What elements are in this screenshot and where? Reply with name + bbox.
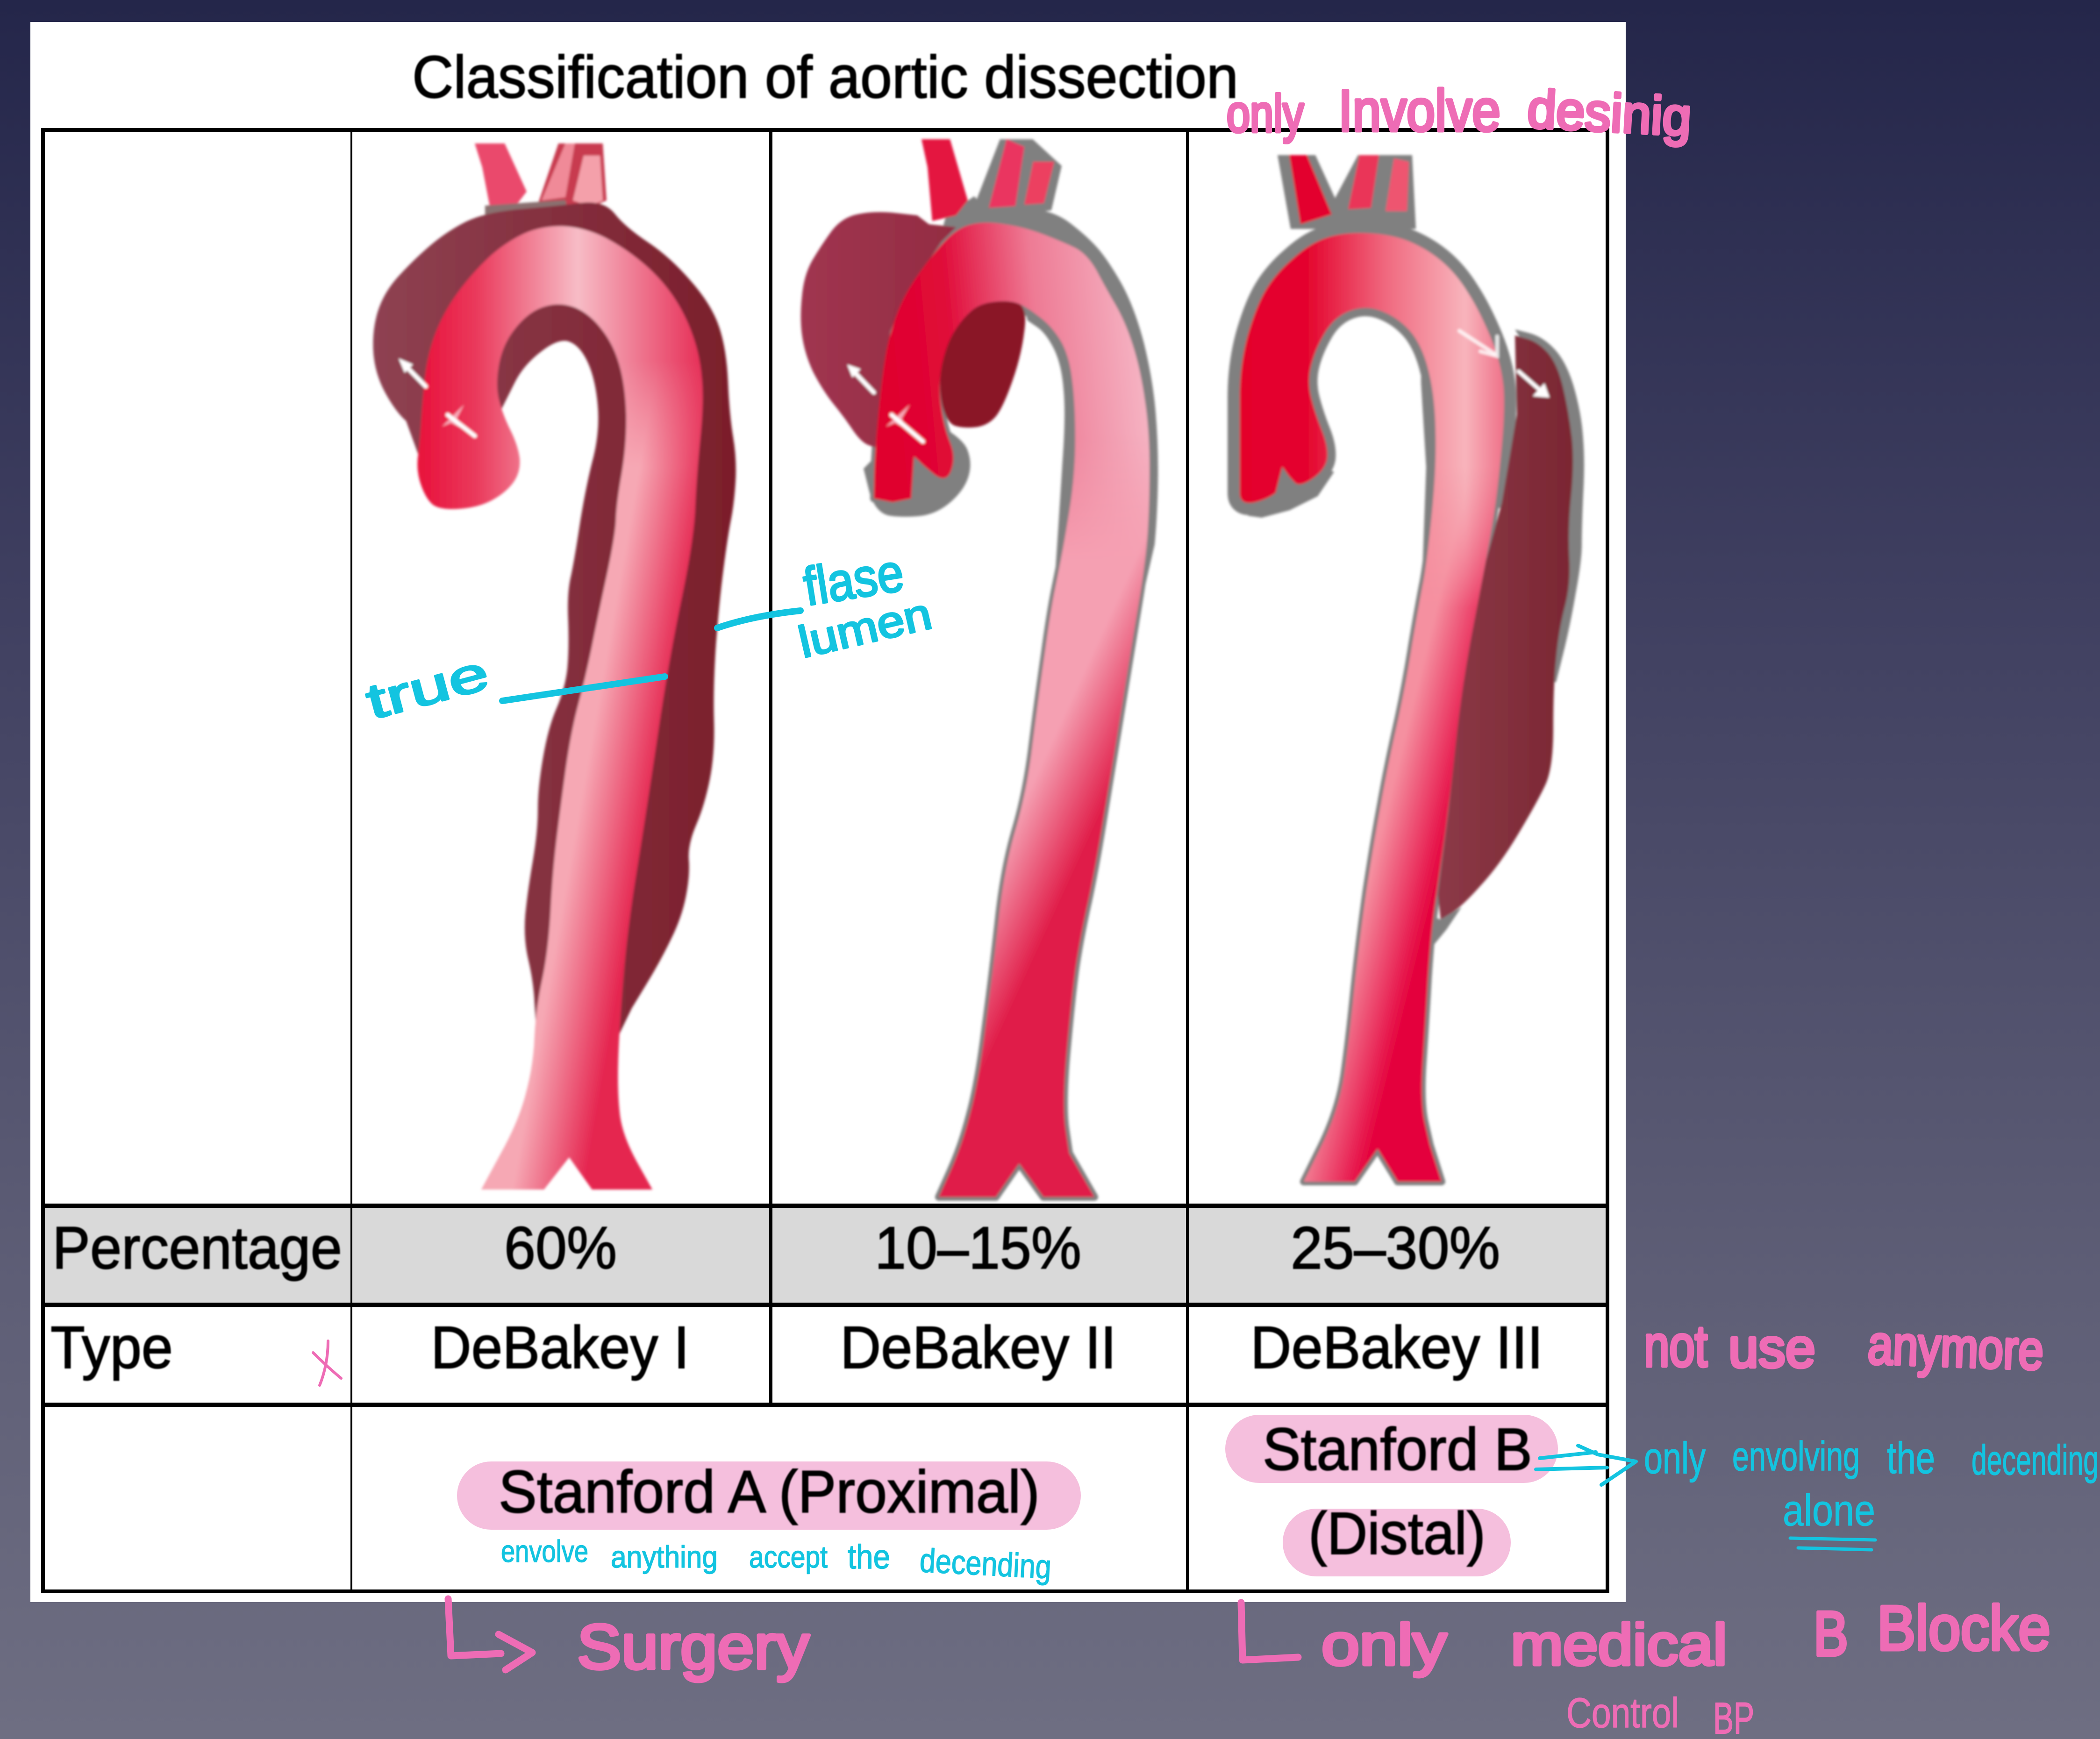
annotation: B blocker: Blocke: [1877, 1593, 2050, 1663]
true lumen: [417, 226, 703, 1190]
annotation: surgery: Surgery: [577, 1611, 810, 1682]
annotation: only envolving the decending alone: the: [1887, 1433, 1935, 1483]
value: 60%: 60%: [504, 1215, 617, 1282]
aorta diagram: DeBakey III: [1240, 155, 1584, 1182]
aorta diagram: DeBakey II: [801, 139, 1158, 1197]
highlight: Distal: (Distal): [1308, 1500, 1486, 1567]
false lumen: inner arch sac: [940, 301, 1025, 428]
value: 25-30%: 25–30%: [1291, 1215, 1500, 1282]
entry arrows: [847, 364, 923, 442]
row label: percentage: Percentage: [52, 1215, 342, 1282]
true lumen shading: descending segment: [481, 335, 703, 1190]
annotation: only medical: [1321, 1612, 1727, 1677]
false lumen: ascending sac: [801, 212, 956, 448]
table grid: [41, 130, 1609, 1591]
annotation: only envolving the decending alone: [1644, 1433, 2099, 1550]
grey wall: [864, 139, 1158, 1197]
true lumen: [1240, 233, 1504, 1182]
true lumen shading: descending segment: [1303, 491, 1495, 1183]
annotation: B blocker: [1814, 1593, 2050, 1669]
annotation: envolve anything accept the decending: anything: [611, 1539, 718, 1574]
row label: type: Type: [50, 1314, 173, 1381]
grey wall: [1240, 155, 1584, 1182]
annotation: not use anymore: not: [1644, 1314, 1707, 1379]
annotation: only involve descending: only: [1227, 85, 1304, 143]
annotation: arrow from Stanford B: [1536, 1446, 1636, 1485]
annotation: true lumen: [361, 645, 665, 730]
title: Classification of aortic dissection: [412, 44, 1238, 111]
true lumen shading: descending segment: [940, 479, 1147, 1198]
annotation: false lumen: flase: [800, 542, 907, 617]
entry arrows: [399, 358, 475, 436]
annotation: true lumen: true: [361, 645, 494, 730]
annotation: only medical: only: [1321, 1612, 1447, 1677]
annotation: control BP: Control: [1566, 1690, 1679, 1737]
branch vessels: [1289, 155, 1409, 224]
annotation: envolve anything accept the decending: decending: [919, 1542, 1052, 1586]
annotation: control BP: [1566, 1690, 1754, 1739]
annotation: false lumen: lumen: [794, 589, 936, 667]
false lumen: descending sac: [1438, 335, 1573, 919]
annotation: only envolving the decending alone: only: [1644, 1433, 1706, 1483]
annotation: only medical: medical: [1511, 1612, 1727, 1677]
table text: [50, 1215, 1543, 1381]
annotation: only involve descending: [1227, 78, 1693, 147]
annotation: envolve anything accept the decending: [501, 1534, 1052, 1586]
annotation: envolve anything accept the decending: envolve: [501, 1534, 588, 1568]
branch vessels: [475, 143, 607, 215]
annotation: only envolving the decending alone: alone: [1783, 1486, 1875, 1535]
false lumen: [373, 202, 736, 1034]
annotation: arrow to surgery: [448, 1599, 532, 1670]
annotation: B blocker: B: [1814, 1598, 1848, 1669]
annotation: not use anymore: use: [1729, 1318, 1815, 1379]
entry arrows: [1459, 331, 1550, 398]
value: DeBakey II: DeBakey II: [840, 1314, 1116, 1381]
annotation: false lumen: [717, 542, 936, 667]
annotation: envolve anything accept the decending: accept: [749, 1539, 828, 1574]
annotation: not use anymore: [1644, 1314, 2044, 1382]
annotation: not use anymore: anymore: [1867, 1314, 2044, 1382]
true lumen: [874, 222, 1150, 1197]
value: DeBakey I: DeBakey I: [431, 1314, 689, 1381]
value: DeBakey III: DeBakey III: [1250, 1314, 1543, 1381]
annotation: only envolving the decending alone: envolving: [1732, 1433, 1860, 1479]
branch vessels: [921, 139, 1054, 221]
value: 10-15%: 10–15%: [875, 1215, 1081, 1282]
annotation: envolve anything accept the decending: the: [848, 1539, 890, 1576]
aorta diagram: DeBakey I: [373, 143, 736, 1190]
annotation: only involve descending: desinig: [1526, 79, 1693, 147]
annotation: L mark to only medical: [1241, 1603, 1298, 1660]
panel: white slide table card: [30, 22, 1626, 1602]
mark: cross beside type: [313, 1341, 341, 1385]
highlight: Stanford B: Stanford B: [1263, 1416, 1532, 1483]
highlight: Stanford A: Stanford A (Proximal): [499, 1459, 1040, 1525]
annotation: only involve descending: Involve: [1338, 78, 1500, 143]
